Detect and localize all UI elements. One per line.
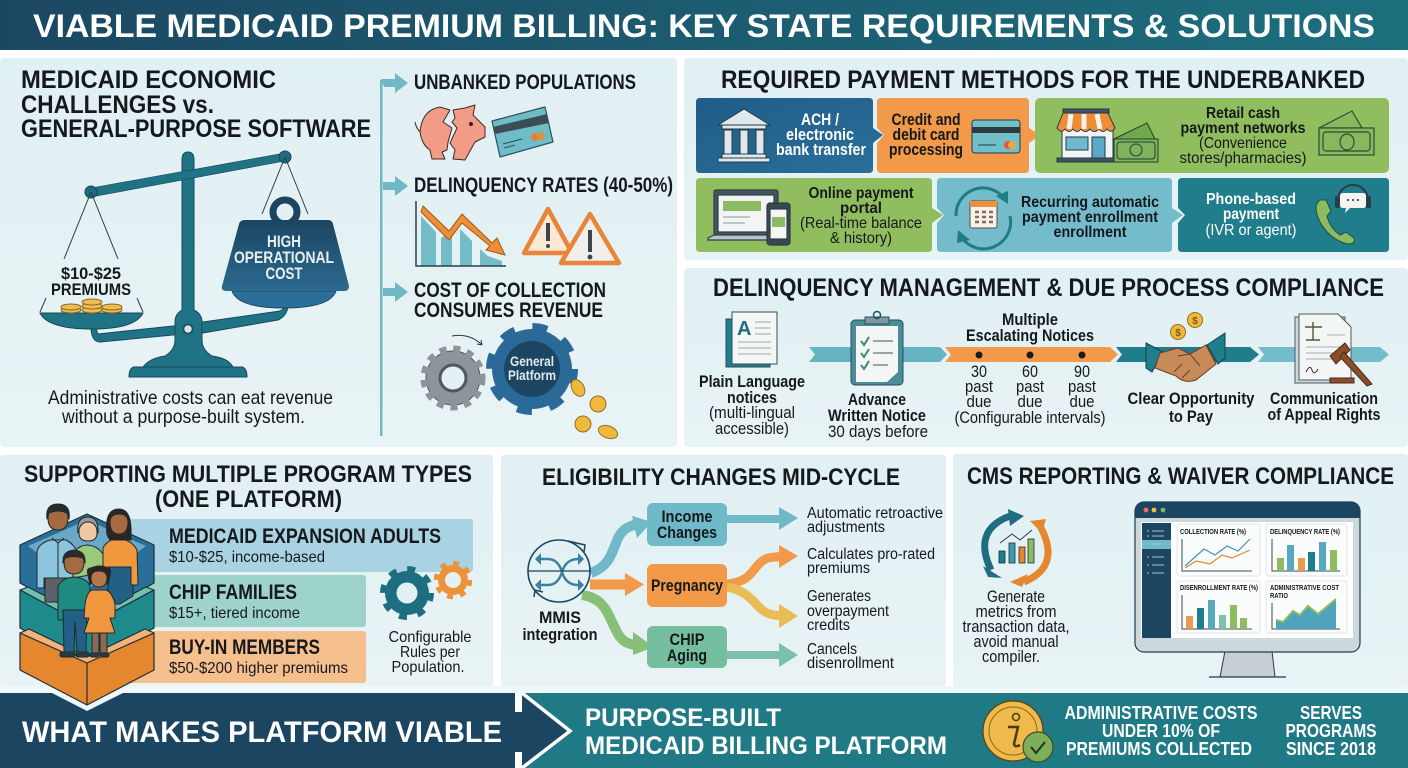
outcome text: retroactive adjustments: adjustments [807, 519, 885, 536]
text: generate metrics: transaction data, [962, 618, 1070, 636]
stat: administrative costs under 10%: UNDER 10% OF [1102, 721, 1220, 741]
card: ACH bank transfer: ACH / [801, 111, 839, 129]
outcome text: pro-rated premiums: Calculates pro-rated [807, 546, 935, 563]
tier: buy-in members: BUY-IN MEMBERS [169, 636, 320, 659]
icon: MMIS integration: integration [522, 625, 598, 644]
box: chip aging: CHIP [670, 630, 704, 649]
item: delinquency rates [414, 174, 673, 266]
icon: balance scale: HIGH [267, 233, 301, 251]
dashboard card: collection rate: COLLECTION RATE (%) [1180, 529, 1246, 536]
icon: warning triangles [524, 209, 619, 263]
item: unbanked populations: UNBANKED POPULATIONS [414, 71, 636, 94]
dashboard card: disenrollment rate: DISENROLLMENT RATE (%) [1180, 585, 1258, 592]
tier: chip families: $15+, tiered income [169, 605, 300, 622]
dashboard card: administrative cost ratio: RATIO [1270, 593, 1288, 600]
stat: serves programs since 2018: SINCE 2018 [1286, 739, 1376, 759]
text: configurable rules [388, 629, 472, 676]
stat: serves programs since 2018: PROGRAMS [1286, 721, 1376, 741]
step: multiple escalating notices: past [965, 378, 993, 396]
icon: cash stack [1114, 123, 1158, 162]
heading: economic challenges: GENERAL-PURPOSE SOFTWARE [21, 115, 371, 143]
step: multiple escalating notices: past [1068, 378, 1096, 396]
icon: recurring calendar [956, 188, 1011, 249]
text: administrative costs note: Administrative costs can eat revenue [48, 387, 333, 409]
icon: falling coins [568, 377, 619, 441]
box: income changes: Changes [657, 523, 717, 542]
tier: medicaid expansion adults: $10-$25, income-based [169, 549, 325, 566]
icon: cash bills [1319, 111, 1374, 155]
card: ACH bank transfer: electronic [786, 126, 854, 144]
icon: storefront [1057, 109, 1115, 162]
icon: general platform gear: General [510, 353, 554, 369]
outcome text: cancels disenrollment [807, 641, 895, 672]
step: clear opportunity to pay [1128, 312, 1255, 426]
card: credit and debit processing: Credit and [892, 111, 960, 129]
footer banner [0, 686, 1408, 768]
outcome text: cancels disenrollment: disenrollment [807, 655, 895, 672]
tier: chip families [125, 575, 366, 627]
icon: isometric stacked tiers [20, 514, 154, 705]
step: multiple escalating notices: (Configurable intervals) [954, 409, 1106, 427]
icon: clipboard checklist [851, 312, 903, 385]
text: generate metrics: avoid manual [974, 633, 1058, 651]
icon: family group [37, 504, 138, 657]
outcome text: overpayment credits [807, 588, 890, 634]
step: multiple escalating notices: 90 [1074, 363, 1090, 381]
icon: handshake with coins: $ [1192, 316, 1198, 327]
outcome text: overpayment credits: Generates [807, 588, 871, 605]
text: configurable rules: Configurable [388, 629, 472, 646]
icon: legal document and gavel [1295, 314, 1372, 386]
icon: MMIS integration: MMIS [539, 608, 581, 627]
step: clear opportunity to pay: Clear Opportunity [1128, 390, 1255, 408]
dashboard card: delinquency rate [1266, 524, 1347, 576]
tier: chip families: CHIP FAMILIES [169, 581, 297, 604]
tier: buy-in members: $50-$200 higher premiums [169, 660, 348, 677]
icon: info coin with check [983, 701, 1053, 762]
item: cost of collection [414, 279, 619, 441]
item: delinquency rates: DELINQUENCY RATES (40-50%) [414, 174, 673, 197]
icon: laptop and phone [708, 190, 790, 245]
card: retail cash networks [1035, 98, 1389, 173]
tier: medicaid expansion adults [125, 519, 473, 572]
heading: eligibility changes: ELIGIBILITY CHANGES MID-CYCLE [542, 464, 900, 491]
item: cost of collection: CONSUMES REVENUE [414, 299, 603, 322]
icon: bank building [718, 109, 770, 162]
item: cost of collection: COST OF COLLECTION [414, 279, 606, 302]
step: multiple escalating notices: 30 [971, 363, 987, 381]
dashboard card: collection rate [1177, 524, 1260, 576]
title: VIABLE MEDICAID PREMIUM BILLING: KEY STATE REQUIREMENTS & SOLUTIONS [33, 8, 1375, 44]
card: retail cash networks: Retail cash [1206, 105, 1280, 122]
arrow: footer chevron [515, 693, 570, 768]
card: credit and debit processing: processing [889, 141, 963, 159]
connector bracket with arrows [380, 73, 408, 436]
text: generate metrics: Generate [987, 588, 1045, 606]
outcome text: retroactive adjustments: Automatic retroactive [807, 505, 943, 522]
item: unbanked populations [414, 71, 636, 160]
step: multiple escalating notices [954, 311, 1106, 427]
title banner [0, 0, 1408, 50]
card: online payment portal [696, 178, 943, 252]
heading: program types: SUPPORTING MULTIPLE PROGRAM TYPES [24, 461, 472, 488]
text: configurable rules: Population. [392, 659, 464, 676]
card: phone-based payment [1178, 178, 1389, 252]
step: multiple escalating notices: due [966, 393, 992, 411]
box: income changes [647, 503, 727, 546]
step: multiple escalating notices: past [1016, 378, 1044, 396]
box: pregnancy: Pregnancy [651, 576, 723, 595]
step: communication of appeal rights [1268, 314, 1380, 424]
outcome text: overpayment credits: overpayment [807, 603, 890, 620]
outcome text: cancels disenrollment: Cancels [807, 641, 857, 658]
panel: CMS reporting [953, 454, 1408, 687]
outcome text: pro-rated premiums: premiums [807, 560, 870, 577]
icon: balance scale: PREMIUMS [51, 280, 131, 299]
heading: program types: (ONE PLATFORM) [155, 486, 342, 513]
card: online payment portal: portal [840, 200, 882, 217]
panel: supporting multiple program types [0, 455, 493, 711]
dashboard card: administrative cost ratio: ADMINISTRATIVE COST [1270, 585, 1340, 592]
icon: document: A [737, 318, 751, 340]
card: phone-based payment: Phone-based [1206, 191, 1296, 208]
icon: balance scale: OPERATIONAL [234, 249, 334, 267]
icon: configurable gears [383, 563, 470, 617]
panel: required payment methods [684, 58, 1408, 260]
icon: falling chart [416, 201, 506, 266]
icon: balance scale: COST [266, 265, 302, 283]
step: clear opportunity to pay: to Pay [1169, 408, 1214, 426]
step: advance written notice: Written Notice [828, 407, 926, 425]
arrow: gear rotation [452, 335, 482, 345]
heading: economic challenges: MEDICAID ECONOMIC [21, 66, 276, 94]
step: multiple escalating notices: Multiple [1002, 311, 1058, 329]
text: configurable rules: Rules per [400, 644, 461, 661]
icon: phone with headset [1316, 185, 1371, 244]
card: ACH bank transfer: bank transfer [776, 141, 866, 159]
panel: eligibility changes mid-cycle [501, 455, 946, 686]
step: advance written notice: Advance [848, 391, 906, 409]
dashboard card: delinquency rate: DELINQUENCY RATE (%) [1270, 529, 1340, 536]
stat: administrative costs under 10%: PREMIUMS COLLECTED [1066, 739, 1252, 759]
footer text: purpose-built platform [585, 704, 947, 760]
icon: general platform gear: Platform [508, 367, 556, 383]
text: generate metrics: compiler. [982, 648, 1040, 666]
card: credit and debit processing [877, 98, 1040, 173]
card: recurring automatic payment: enrollment [1054, 224, 1127, 241]
step: multiple escalating notices: due [1018, 393, 1042, 411]
footer text: purpose-built platform: MEDICAID BILLING PLATFORM [585, 732, 947, 760]
stat: serves programs since 2018: SERVES [1300, 703, 1362, 723]
step: communication of appeal rights: of Appeal Rights [1268, 406, 1380, 424]
icon: credit card [972, 120, 1020, 153]
dashboard card: disenrollment rate [1177, 581, 1260, 633]
chevron base behind stack [52, 693, 123, 711]
heading: program types [24, 461, 472, 513]
icon: handshake with coins [1146, 312, 1225, 381]
icon: gray gear [424, 349, 482, 407]
card: retail cash networks: stores/pharmacies) [1180, 150, 1306, 167]
step: plain language notices: notices [727, 389, 777, 407]
icon: reporting monitor [1135, 502, 1360, 677]
card: retail cash networks: (Convenience [1199, 135, 1287, 152]
outcome text: retroactive adjustments [807, 505, 943, 536]
outcome text: pro-rated premiums [807, 546, 935, 577]
outcome text: overpayment credits: credits [807, 617, 850, 634]
icon: general platform gear [490, 327, 574, 411]
icon: bank card [492, 107, 553, 157]
card: phone-based payment: (IVR or agent) [1206, 222, 1296, 239]
stat: administrative costs under 10%: ADMINISTRATIVE COSTS [1064, 703, 1258, 723]
card: credit and debit processing: debit card [892, 126, 960, 144]
step: plain language notices: accessible) [715, 420, 789, 438]
box: chip aging: Aging [667, 646, 707, 665]
tier: medicaid expansion adults: MEDICAID EXPANSION ADULTS [169, 525, 441, 548]
step: multiple escalating notices: Escalating Notices [966, 327, 1094, 345]
panel: delinquency management [684, 268, 1408, 447]
card: recurring automatic payment: payment enrollment [1022, 209, 1159, 226]
text: generate metrics [962, 588, 1070, 666]
card: retail cash networks: payment networks [1180, 120, 1306, 137]
step: communication of appeal rights: Communication [1270, 390, 1378, 408]
icon: MMIS integration [522, 540, 598, 644]
arrows: eligibility flow [582, 507, 798, 667]
icon: handshake with coins: $ [1175, 328, 1181, 339]
box: income changes: Income [662, 507, 712, 526]
box: chip aging [647, 626, 727, 668]
step: plain language notices [699, 312, 805, 438]
card: online payment portal: & history) [830, 230, 892, 247]
stat: administrative costs under 10% [1064, 703, 1258, 759]
stat: serves programs since 2018 [1286, 703, 1376, 759]
text: administrative costs note [48, 387, 333, 428]
footer label: what makes platform viable [0, 693, 570, 768]
text: generate metrics: metrics from [976, 603, 1056, 621]
step: multiple escalating notices: due [1070, 393, 1094, 411]
footer label: what makes platform viable: WHAT MAKES PLATFORM VIABLE [22, 716, 502, 749]
text: administrative costs note: without a purpose-built system. [61, 406, 305, 428]
tier: buy-in members [125, 631, 366, 683]
step: plain language notices: Plain Language [699, 373, 805, 391]
timeline arrow band [809, 347, 1389, 362]
card: recurring automatic payment [937, 178, 1183, 252]
heading: economic challenges [21, 66, 371, 143]
dashboard card: administrative cost ratio [1266, 581, 1347, 633]
icon: broken piggy bank [415, 105, 485, 160]
step: advance written notice: 30 days before [828, 423, 928, 441]
step: advance written notice [828, 312, 928, 441]
icon: metrics cycle [983, 509, 1048, 587]
icon: balance scale [40, 151, 349, 377]
card: phone-based payment: payment [1223, 206, 1280, 223]
step: plain language notices: (multi-lingual [709, 404, 795, 422]
card: online payment portal: Online payment [808, 185, 914, 202]
heading: economic challenges: CHALLENGES vs. [21, 91, 214, 119]
icon: balance scale: $10-$25 [61, 264, 121, 283]
card: recurring automatic payment: Recurring automatic [1021, 194, 1159, 211]
footer text: purpose-built platform: PURPOSE-BUILT [585, 704, 781, 732]
panel: medicaid economic challenges [0, 58, 677, 447]
card: online payment portal: (Real-time balance [800, 215, 922, 232]
step: multiple escalating notices: 60 [1022, 363, 1038, 381]
box: pregnancy [647, 564, 727, 607]
card: ACH bank transfer [696, 98, 883, 173]
